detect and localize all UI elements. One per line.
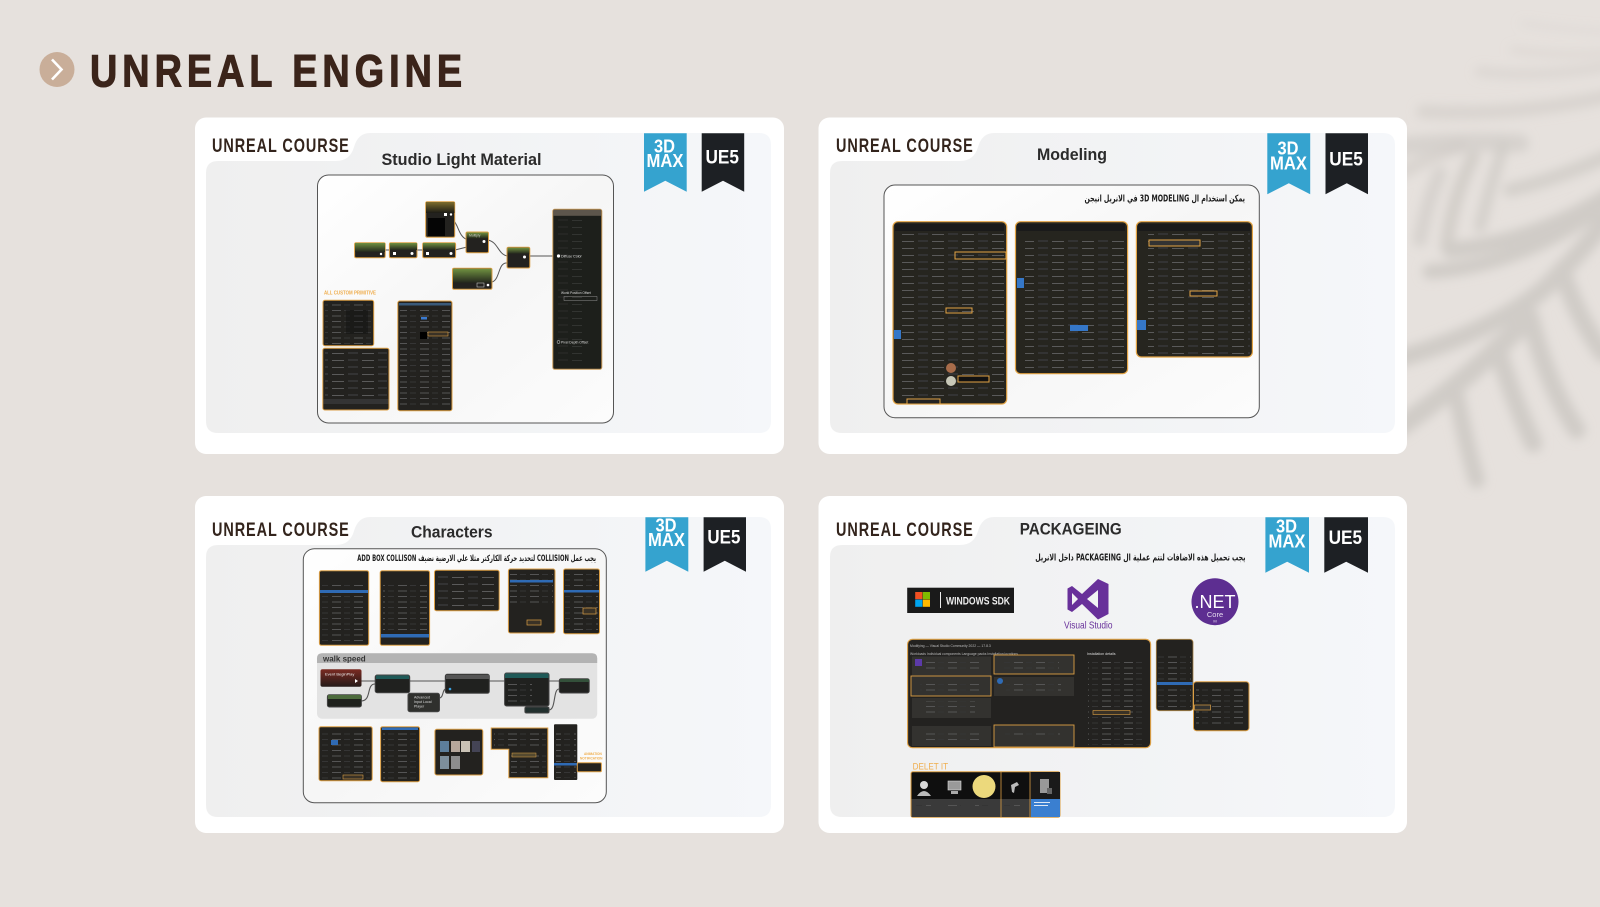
- blueprint nodes: Advanced: [414, 696, 430, 700]
- blueprint nodes: Input Local: [414, 700, 432, 704]
- title: [40, 46, 462, 96]
- node: material output: [553, 209, 602, 369]
- orange note: [580, 752, 603, 760]
- screen: platform submenu: [1194, 682, 1249, 731]
- arabic note: يجب تحميل هذه الاضافات لتتم عملية ال PACKAGEING داخل الانريل: [1035, 552, 1246, 563]
- thumbnails: [917, 775, 1052, 798]
- badge: 3D MAX: MAX: [646, 151, 684, 171]
- badge: 3D MAX: [644, 133, 687, 192]
- node: add: [507, 247, 530, 268]
- badge: UE5: UE5: [707, 526, 741, 548]
- node: material output: Pixel Depth Offset: [561, 340, 588, 344]
- logo: windows sdk: [907, 588, 1014, 613]
- course label: UNREAL COURSE: [212, 135, 349, 157]
- course label: UNREAL COURSE: [212, 519, 349, 541]
- badge: UE5: [702, 133, 744, 192]
- orange note: ANIMATION: [584, 752, 603, 756]
- badge: 3D MAX: MAX: [1270, 153, 1307, 173]
- event node: [320, 669, 362, 687]
- label: all custom primitive: ALL CUSTOM PRIMITIVE: [324, 290, 376, 296]
- arabic note: يجب عمل COLLISION لتحديد حركة الكاركتر مثلا علي الارضية نضيف ADD BOX COLLISON: [357, 553, 596, 563]
- screen: visual studio installer: Installation details: [1087, 652, 1116, 656]
- screen: visual studio installer: Workloads Individual components Language packs Installation locations: [910, 652, 1018, 656]
- orange note: NOTIFICATION: [580, 756, 603, 760]
- event node: Event BeginPlay: [325, 672, 354, 676]
- settings panels: [323, 300, 452, 411]
- panel heading: Modeling: [1037, 145, 1107, 164]
- screenshot: material graph: [318, 175, 614, 423]
- screen: project settings menu: [1156, 639, 1193, 711]
- panel heading: PACKAGEING: [1020, 520, 1122, 538]
- badge: 3D MAX: MAX: [1268, 531, 1306, 551]
- logo: windows sdk: WINDOWS SDK: [946, 595, 1010, 607]
- node: multiply: Multiply: [469, 234, 481, 238]
- badge: 3D MAX: MAX: [648, 530, 685, 550]
- course label: UNREAL COURSE: [836, 135, 973, 157]
- badge: UE5: [704, 517, 746, 572]
- screen: visual studio installer: [908, 639, 1151, 748]
- logo: .net core: .NET: [1194, 592, 1236, 612]
- logo: visual studio: [1064, 579, 1113, 632]
- badge: 3D MAX: [1267, 133, 1310, 194]
- badge: 3D MAX: 3D: [1278, 138, 1298, 158]
- node: texture sample: [426, 202, 455, 237]
- badge: 3D MAX: [1265, 516, 1309, 573]
- badge: 3D MAX: 3D: [1276, 516, 1297, 536]
- blueprint label: walk speed: [322, 654, 366, 663]
- blueprint nodes: [327, 673, 589, 713]
- logo: .net core: Core: [1207, 610, 1223, 619]
- logo: .net core: M: [1213, 618, 1217, 624]
- panel: studio light material: [195, 118, 784, 454]
- asset thumbnail strip: [911, 772, 1060, 817]
- panel: characters: [195, 496, 784, 833]
- screen: edit options: [1016, 222, 1128, 374]
- node: material output: Diffuse Color: [561, 254, 583, 258]
- panel heading: Studio Light Material: [382, 150, 542, 169]
- panel heading: Characters: [411, 522, 492, 542]
- node: multiply: [466, 232, 488, 253]
- course label: UNREAL COURSE: [836, 519, 973, 541]
- screenshot frame: character setup: [303, 549, 606, 803]
- screen: visual studio installer: Modifying — Visual Studio Community 2022 — 17.8.3: [910, 644, 991, 648]
- label: delete it: DELET IT: [913, 762, 948, 772]
- badge: 3D MAX: 3D: [656, 516, 676, 536]
- badge: UE5: UE5: [1329, 527, 1362, 549]
- logo: visual studio: Visual Studio: [1064, 620, 1113, 632]
- icon: chevron circle: [40, 52, 74, 87]
- top row of screenshots: [319, 569, 600, 645]
- logo: .net core: [1192, 578, 1238, 625]
- badge: 3D MAX: 3D: [654, 136, 675, 156]
- panel: packaging: [818, 496, 1407, 833]
- badge: 3D MAX: [645, 516, 688, 572]
- badge: UE5: [1326, 133, 1368, 194]
- bottom row of screenshots: [319, 724, 601, 782]
- heading text: UNREAL ENGINE: [90, 46, 462, 96]
- node: constant: [452, 268, 492, 289]
- badge: UE5: [1324, 517, 1368, 573]
- node: material output: World Position Offset: [561, 291, 591, 295]
- blueprint nodes: Player: [414, 704, 425, 708]
- screen: uv properties: [1136, 222, 1252, 357]
- panel: modeling: [818, 118, 1407, 454]
- palm leaf shadow: [1400, 23, 1600, 480]
- node row: green parameter nodes: [355, 243, 456, 258]
- badge: UE5: UE5: [706, 146, 739, 168]
- screen: modeling tool list: [893, 222, 1007, 404]
- arabic note: يمكن استخدام ال 3D MODELING في الانريل انيجن: [1085, 193, 1245, 204]
- screenshot frame: modeling tools: [884, 185, 1259, 418]
- blueprint: walk speed: [317, 653, 597, 719]
- badge: UE5: UE5: [1329, 149, 1363, 171]
